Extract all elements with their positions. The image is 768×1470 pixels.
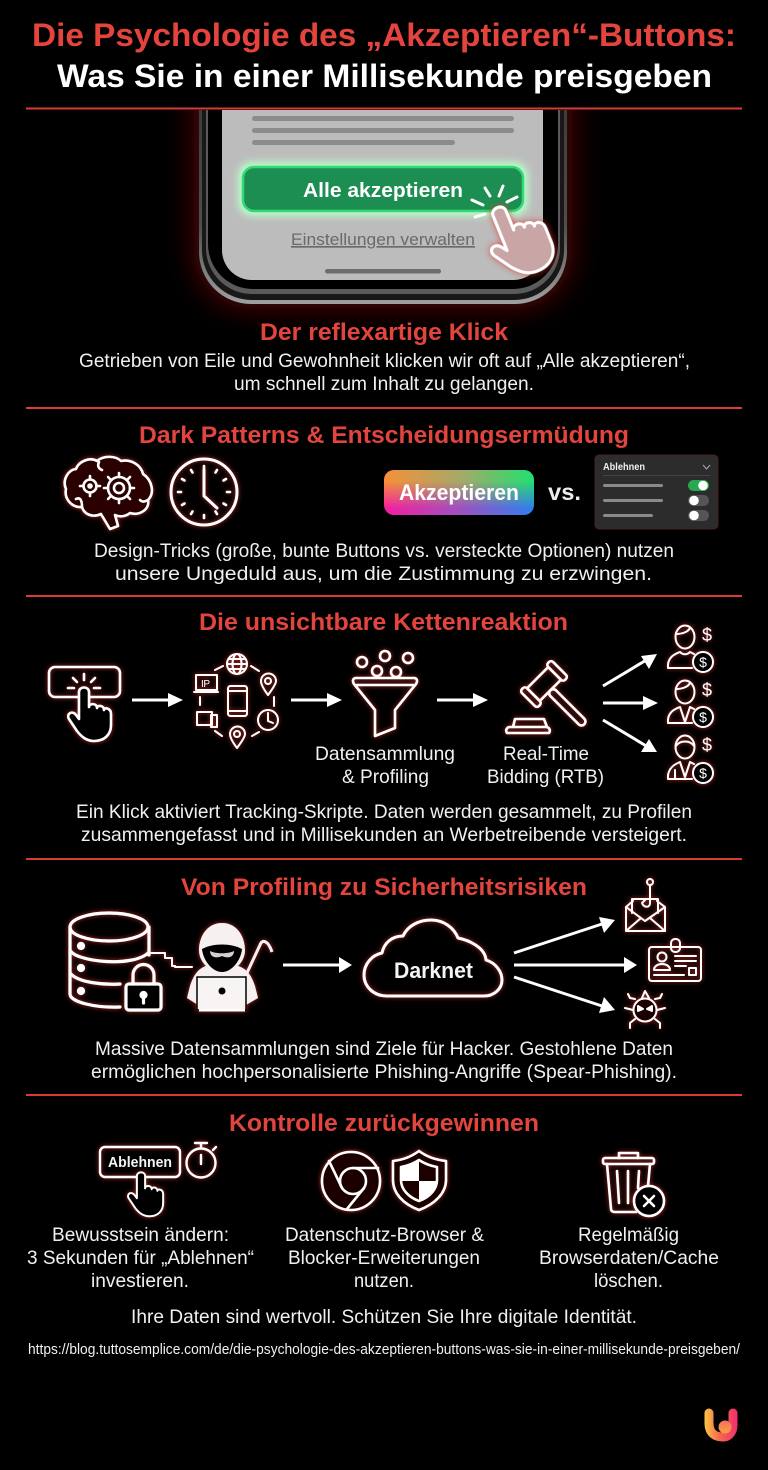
section: Kettenreaktion [49,609,713,846]
body text [94,540,674,585]
icon: reject button with timer [100,1143,216,1216]
icon: advertiser 2: $ [699,709,707,725]
arrow [291,693,342,707]
icon: advertiser 1: $ [699,654,707,670]
text: Regelmäßig: Regelmäßig [578,1224,679,1246]
text: Datenschutz: nutzen. [354,1270,414,1292]
phone screen [222,110,543,280]
closing line: Ihre Daten sind wertvoll. Schützen Sie Ihre digitale Identität. [131,1306,637,1328]
icon: bug [625,991,665,1028]
cloud: Darknet: Darknet [394,958,474,983]
icon: tapping hand [472,186,559,284]
text: Datenschutz: Datenschutz-Browser & [285,1224,484,1246]
body text: Massive Datensammlungen sind Ziele für Hacker. Gestohlene Daten [95,1038,673,1060]
text: Bewusstsein: investieren. [91,1270,189,1292]
icon: reject button with timer: Ablehnen [108,1154,172,1171]
icon: shield [393,1151,446,1210]
body text: zusammengefasst und in Millisekunden an Werbetreibende versteigert. [81,824,687,846]
icon: funnel [353,651,417,736]
section: Kontrolle [27,1110,719,1292]
icon: phishing mail [626,879,665,931]
text: Datenschutz: Blocker-Erweiterungen [288,1247,480,1269]
icon: advertiser 3: $ [699,765,707,781]
heading: Die unsichtbare Kettenreaktion [199,609,568,636]
icon: brain with gears [65,457,152,529]
icon: advertiser 2 [668,680,713,727]
body text: Ein Klick aktiviert Tracking-Skripte. Daten werden gesammelt, zu Profilen [76,801,692,823]
icon: click button [49,667,120,741]
icon: trash can [603,1153,664,1216]
settings panel [595,455,718,529]
icon: advertiser 2: $ [702,680,712,700]
body text: Design-Tricks (große, bunte Buttons vs. versteckte Optionen) nutzen [94,540,674,562]
title: Was Sie in einer Millisekunde preisgeben [57,58,712,94]
text: Bewusstsein [27,1224,254,1292]
green button: Alle akzeptieren [303,180,463,202]
section: Der reflexartige Klick [79,319,690,395]
icon: browser logo [322,1152,380,1210]
section: Der reflexartige Klick: um schnell zum Inhalt zu gelangen. [234,373,534,395]
settings link: Einstellungen verwalten [291,231,475,249]
title [32,17,736,94]
green button [243,167,523,211]
logo [709,1413,733,1437]
label: Datensammlung: Datensammlung [315,743,455,765]
icon: ID card [649,939,701,981]
icon: data network [194,654,278,748]
body text [76,801,692,846]
arrow [437,693,488,707]
arrows to risks [514,917,637,1013]
icon: clock [171,459,237,525]
heading: Von Profiling zu Sicherheitsrisiken [181,874,587,901]
arrow [283,957,352,973]
label: Datensammlung: & Profiling [342,766,429,788]
icon: hacker [187,923,272,1012]
icon: data network: IP [201,679,210,690]
arrows to advertisers [603,654,658,752]
arrow [132,693,183,707]
body text: unsere Ungeduld aus, um die Zustimmung zu erzwingen. [115,563,652,585]
icon: database with lock [70,913,192,1010]
text: Regelmäßig: löschen. [594,1270,663,1292]
icon: advertiser 1 [668,625,713,672]
label: Datensammlung [315,743,455,788]
source url: https://blog.tuttosemplice.com/de/die-psychologie-des-akzeptieren-buttons-was-sie-in-einer-millisekunde-preisgeben/ [28,1342,741,1358]
label: RTB: Real-Time [503,743,589,765]
icon: advertiser 1: $ [702,625,712,645]
button: Akzeptieren: Akzeptieren [399,480,519,505]
title: Die Psychologie des „Akzeptieren“-Buttons: [32,17,736,53]
phone illustration [177,110,589,325]
button: Akzeptieren [384,470,534,515]
heading: Kontrolle zurückgewinnen [229,1110,539,1137]
text: Bewusstsein: 3 Sekunden für „Ablehnen“ [27,1247,254,1269]
settings panel: Ablehnen [603,461,645,473]
heading: Dark Patterns & Entscheidungsermüdung [139,422,629,449]
section: Der reflexartige Klick: Der reflexartige Klick [260,319,509,346]
body text [91,1038,677,1083]
body text: ermöglichen hochpersonalisierte Phishing-Angriffe (Spear-Phishing). [91,1061,677,1083]
icon: gavel [506,660,600,740]
icon: advertiser 3: $ [702,735,712,755]
label: RTB [487,743,604,788]
text: Regelmäßig: Browserdaten/Cache [539,1247,719,1269]
section: Der reflexartige Klick: Getrieben von Eile und Gewohnheit klicken wir oft auf „Alle akzeptieren“, [79,350,690,372]
text: Datenschutz [285,1224,484,1292]
label: RTB: Bidding (RTB) [487,766,604,788]
text: Regelmäßig [539,1224,719,1292]
cloud: Darknet [364,920,502,996]
text: Bewusstsein: Bewusstsein ändern: [52,1224,229,1246]
section: Dark Patterns [65,422,718,585]
icon: advertiser 3 [668,735,713,783]
vs label: vs. [548,479,581,505]
section: Sicherheitsrisiken [70,874,701,1083]
